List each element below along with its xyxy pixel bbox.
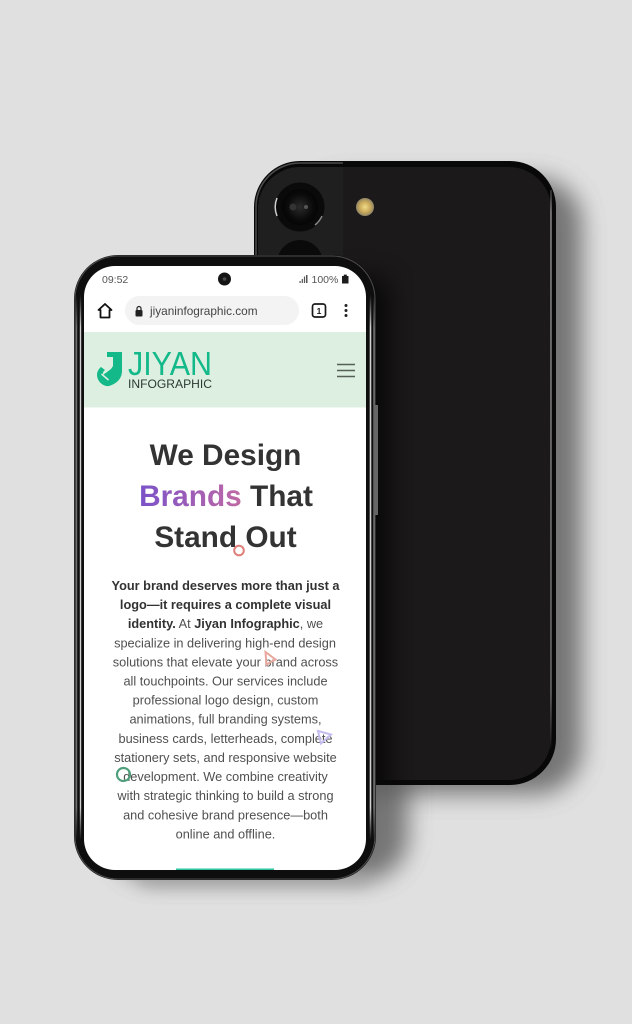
logo tagline: INFOGRAPHIC — [128, 377, 212, 391]
body paragraph: solutions that elevate your brand across — [113, 654, 338, 669]
body paragraph: and cohesive brand presence—both — [123, 807, 328, 822]
right rail highlight — [370, 295, 372, 840]
right rail — [373, 295, 375, 840]
shadow: back phone — [300, 178, 582, 794]
back phone — [254, 161, 556, 820]
body paragraph: with strategic thinking to build a strong — [116, 788, 334, 803]
decorative purple triangle — [318, 731, 331, 744]
body paragraph: development. We combine creativity — [123, 769, 328, 784]
url: jiyaninfographic.com — [149, 304, 258, 318]
heading line 3: Stand Out — [154, 521, 297, 554]
hero heading — [139, 439, 313, 554]
cast shadow on body — [371, 278, 390, 780]
icon: tabs counter — [312, 304, 326, 317]
decorative green ring — [117, 768, 130, 781]
icon: home — [98, 304, 112, 318]
camera strip — [258, 167, 343, 300]
body paragraph: logo—it requires a complete visual — [120, 597, 331, 612]
time: 09:52 — [102, 274, 128, 286]
body inner panel — [258, 167, 551, 780]
body paragraph: animations, full branding systems, — [129, 712, 322, 727]
screen — [84, 266, 366, 870]
front phone — [74, 255, 378, 880]
heading line 2: Brands That — [139, 480, 313, 513]
site header — [84, 332, 366, 408]
front camera — [218, 272, 231, 286]
address bar — [125, 296, 299, 325]
status bar — [102, 274, 348, 286]
button top edge — [176, 868, 274, 870]
decorative red ring — [234, 546, 244, 555]
body paragraph: identity. At Jiyan Infographic, we — [128, 616, 323, 631]
phone body — [254, 161, 556, 785]
icon: battery — [342, 275, 348, 284]
shadow: front phone — [110, 300, 408, 880]
logo mark — [97, 352, 122, 386]
heading line 1: We Design — [150, 439, 301, 472]
left outer rail — [76, 295, 78, 840]
icon: second camera lens — [277, 240, 323, 286]
frame outline — [75, 256, 375, 879]
icon: camera flash — [356, 198, 374, 216]
body paragraph: specialize in delivering high-end design — [114, 635, 336, 650]
body paragraph: all touchpoints. Our services include — [123, 674, 328, 688]
upper rim highlight — [256, 163, 343, 262]
side button — [374, 405, 378, 515]
icon: main camera lens — [275, 182, 324, 232]
body paragraph: professional logo design, custom — [133, 693, 318, 708]
right rim highlight — [550, 190, 552, 750]
icon: signal — [300, 275, 308, 283]
icon: tabs counter: 1 — [317, 306, 322, 316]
shadow: front phone floor — [140, 872, 370, 888]
body paragraph: Your brand deserves more than just a — [112, 578, 340, 593]
left rail highlight — [80, 295, 82, 840]
logo — [97, 345, 212, 391]
body paragraph: business cards, letterheads, complete — [118, 731, 333, 746]
decorative orange triangle — [266, 652, 276, 664]
logo name: JIYAN — [128, 345, 212, 382]
body paragraph: online and offline. — [176, 826, 275, 841]
battery percent: 100% — [312, 274, 338, 286]
icon: lock — [136, 306, 142, 316]
body paragraph — [112, 578, 340, 841]
icon: menu dots — [344, 304, 348, 317]
icon: hamburger menu — [337, 364, 355, 376]
body paragraph: stationery sets, and responsive website — [114, 750, 337, 765]
phone frame — [74, 255, 376, 880]
